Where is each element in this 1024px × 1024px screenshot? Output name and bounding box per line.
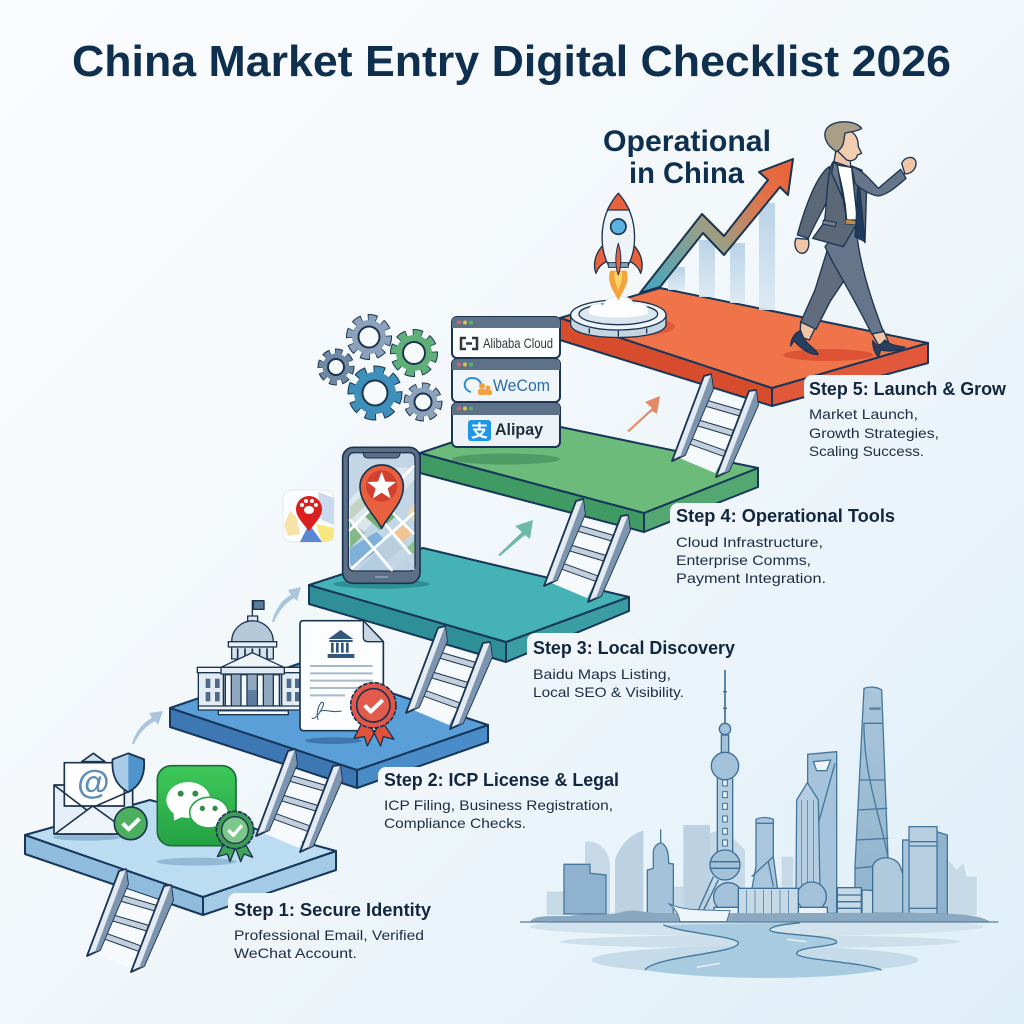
Shanghai Tower [855, 687, 888, 913]
gear 1 [350, 318, 388, 356]
center tower [752, 818, 778, 890]
front leg [825, 222, 883, 334]
right arm [852, 167, 906, 196]
label: step 1: WeChat Account. [234, 945, 357, 961]
card: WeCom [452, 359, 560, 402]
label: step 5: Market Launch, [809, 406, 918, 422]
background towers [547, 825, 977, 915]
gear 4 [352, 370, 398, 416]
label: step 4: Payment Integration. [676, 570, 826, 586]
ladder 3 [406, 626, 492, 729]
label: step 2: Step 2: ICP License & Legal [384, 770, 619, 790]
heading: Operational in China: in China [629, 157, 744, 190]
ladder 5 [672, 374, 758, 477]
water reflection [530, 917, 983, 978]
label: step 3: Baidu Maps Listing, [533, 666, 671, 682]
card: WeCom: WeCom [493, 376, 550, 395]
icon: rocket on launch pad [568, 193, 675, 337]
label: step 4: Cloud Infrastructure, [676, 534, 823, 550]
left shoe [791, 331, 818, 354]
label: step 4: Enterprise Comms, [676, 552, 811, 568]
icon: smartphone with map pin [333, 447, 430, 589]
chart: rising bars [668, 203, 775, 310]
icon: licence document with seal [300, 621, 396, 746]
icon: Baidu Maps app [283, 490, 334, 542]
right towers [903, 827, 947, 914]
right ankle [872, 330, 888, 345]
label: step 4 [670, 503, 895, 586]
ladder 2 [256, 749, 342, 852]
Jin Mao tower [796, 783, 820, 890]
hair [825, 122, 862, 152]
label: step 1: Step 1: Secure Identity [234, 900, 431, 920]
arrow: step 2 to 3 [272, 587, 301, 622]
gear 2 [394, 333, 434, 373]
platform 4: green [420, 419, 758, 532]
icon: email envelope with shield and check [53, 753, 147, 841]
belt [845, 219, 856, 225]
heading: Operational in China: Operational [603, 125, 771, 158]
icon: email envelope with shield and check: @ [77, 764, 110, 801]
icon: gears [321, 318, 439, 418]
label: step 5 [804, 375, 1007, 459]
label: step 1: Professional Email, Verified [234, 927, 424, 943]
card: Alipay [452, 403, 560, 447]
rear leg [801, 247, 852, 329]
arrow: step 4 to 5 [627, 396, 660, 432]
card: Alibaba Cloud [452, 317, 560, 358]
shirt [837, 165, 857, 220]
arrow: step 1 to 2 [132, 711, 163, 744]
neck and head [834, 150, 851, 167]
label: step 2: ICP Filing, Business Registration, [384, 797, 613, 813]
gear 5 [407, 386, 439, 418]
card: Alibaba Cloud: Alibaba Cloud [483, 335, 553, 351]
arrow: step 3 to 4 [498, 520, 533, 556]
Shanghai skyline [520, 670, 998, 978]
icon: WeChat app with verified badge [157, 766, 254, 866]
platform 5: orange [560, 288, 928, 406]
left lapel [832, 162, 847, 220]
label: step 5: Scaling Success. [809, 443, 924, 459]
riverbank and ground line [520, 903, 998, 922]
icon: government building [197, 600, 301, 715]
ladder 4 [544, 499, 630, 602]
gear 3 [321, 352, 351, 382]
pocket [823, 220, 837, 227]
right shoe [873, 340, 905, 357]
jacket [813, 162, 867, 247]
launch pad [568, 300, 675, 337]
platform 3: teal [309, 548, 629, 662]
shadow under tool cards [452, 454, 560, 464]
arrow: growth trend [640, 159, 793, 293]
label: step 5: Growth Strategies, [809, 425, 939, 441]
Oriental Pearl tower [698, 670, 827, 914]
left hand [795, 238, 809, 253]
label: step 4: Step 4: Operational Tools [676, 506, 895, 526]
rocket fins [595, 245, 642, 273]
card: Alipay: Alipay [495, 420, 543, 439]
label: step 3 [527, 633, 735, 700]
ladder 1 [87, 869, 173, 972]
exhaust cloud [588, 296, 649, 318]
label: step 3: Step 3: Local Discovery [533, 638, 735, 658]
rocket body [602, 193, 635, 265]
left ankle [800, 322, 815, 340]
left towers [564, 829, 673, 914]
illustration: businesswoman walking [783, 122, 916, 361]
flame [609, 271, 628, 301]
platform 2: blue [170, 663, 488, 788]
card: Alipay: 支 [471, 421, 488, 441]
convention hall [738, 858, 903, 916]
right hand [902, 157, 916, 174]
label: step 2 [378, 767, 619, 831]
label: step 1 [228, 893, 431, 961]
platform 1: light blue [25, 800, 336, 915]
label: step 3: Local SEO & Visibility. [533, 684, 684, 700]
World Financial Center [808, 752, 837, 913]
label: step 5: Step 5: Launch & Grow [809, 379, 1007, 399]
left arm [797, 167, 833, 238]
open jacket side [855, 175, 865, 242]
title: China Market Entry Digital Checklist 2026 [72, 37, 951, 86]
heading: Operational in China [603, 125, 771, 190]
label: step 2: Compliance Checks. [384, 815, 526, 831]
